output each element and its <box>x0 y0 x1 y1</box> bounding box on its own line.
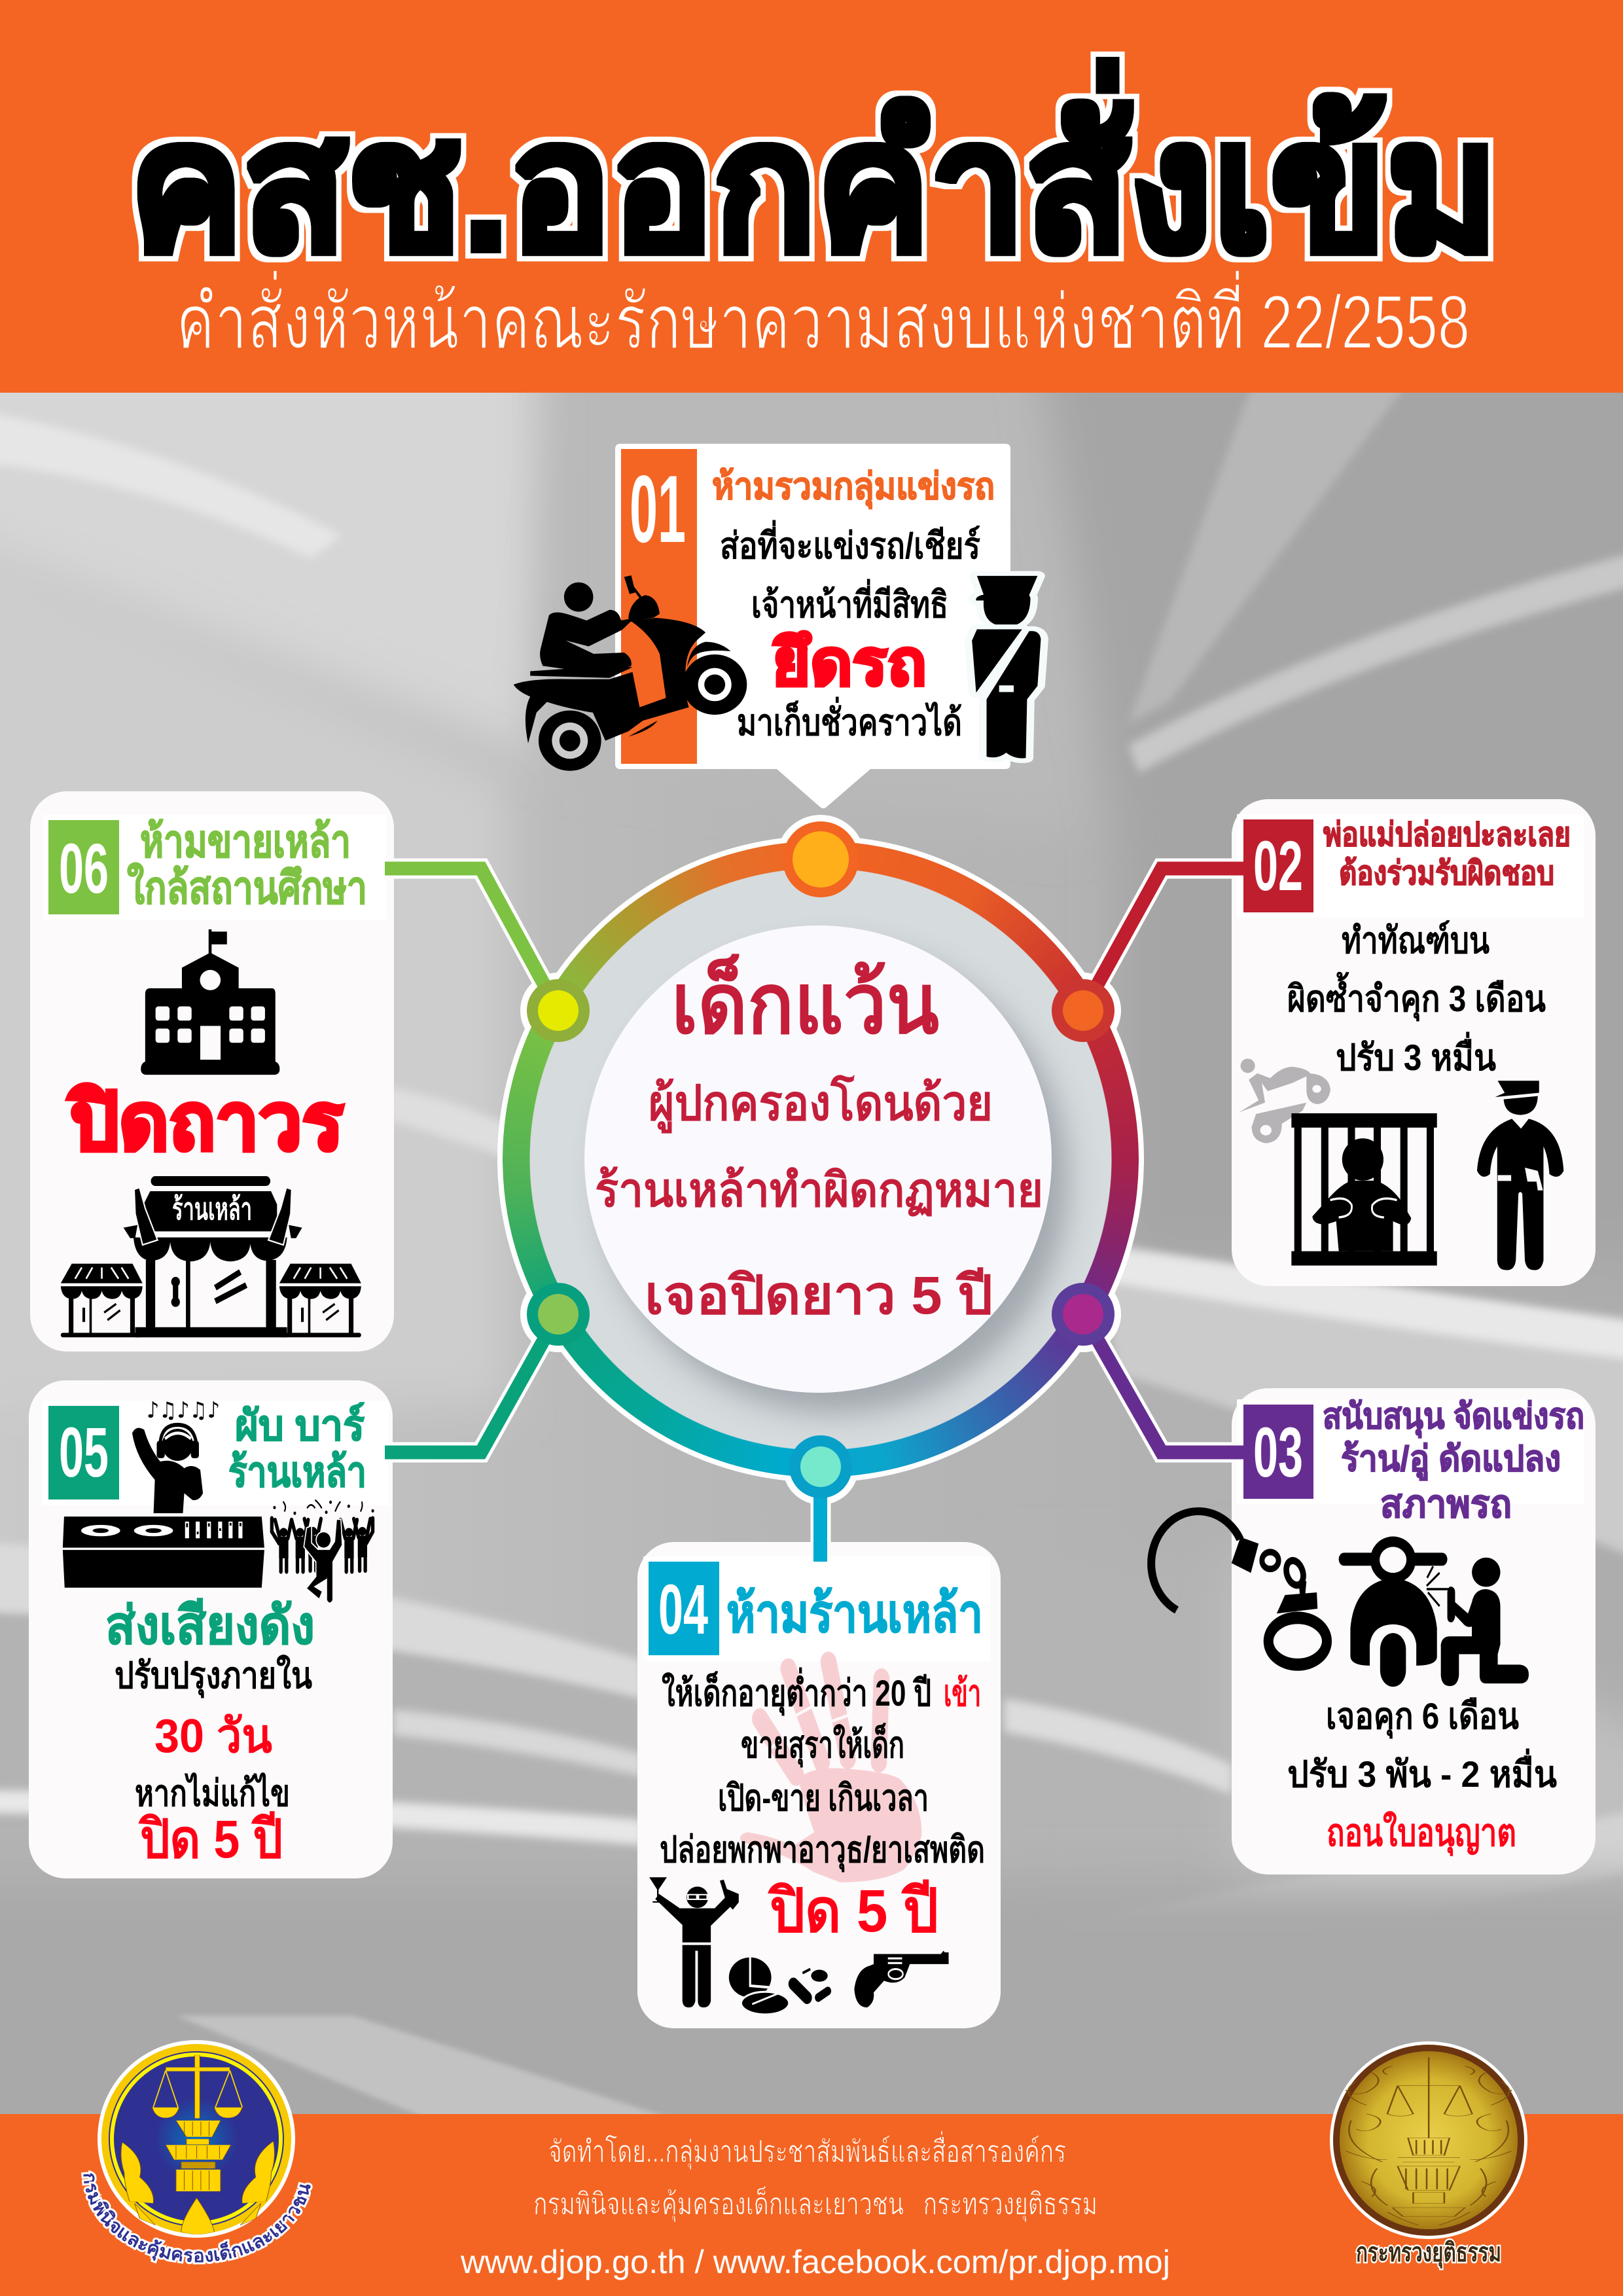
connector 04 <box>813 1466 827 1562</box>
centre line 1: ผู้ปกครองโดนด้วย <box>649 1074 993 1134</box>
node bottom <box>789 1435 852 1498</box>
icon: music notes: ♪♫♪♫♪ <box>147 1397 220 1424</box>
30 days: 30 วัน <box>154 1710 272 1763</box>
number 01: 01 <box>630 456 686 562</box>
centre line 2: ร้านเหล้าทำผิดกฏหมาย <box>595 1164 1043 1217</box>
logo: juvenile department <box>81 2040 313 2265</box>
node right lower <box>1052 1283 1115 1346</box>
centre line 3: เจอปิดยาว 5 ปี <box>645 1266 993 1325</box>
number box <box>48 1406 119 1499</box>
number 03: 03 <box>1253 1412 1303 1492</box>
body line 2: ขายสุราให้เด็ก <box>741 1722 904 1768</box>
heading: ห้ามร้านเหล้า <box>726 1585 983 1643</box>
node left upper <box>527 979 590 1042</box>
line: improve within: ปรับปรุงภายใน <box>115 1654 312 1698</box>
icon: DJ <box>132 1425 203 1513</box>
footer text <box>460 2130 1170 2280</box>
card <box>29 1380 393 1878</box>
header strip <box>643 1556 990 1661</box>
footer band <box>0 2114 1623 2296</box>
heading line 3: สภาพรถ <box>1380 1483 1512 1526</box>
icon: prisoner in cage <box>1291 1113 1437 1266</box>
icon: handcuffs <box>1151 1511 1327 1664</box>
body line 4: ปล่อยพกพาอาวุธ/ยาเสพติด <box>660 1829 985 1873</box>
card <box>30 791 394 1352</box>
card <box>637 1542 1001 2028</box>
icon: DJ deck <box>63 1516 264 1588</box>
heading line 2: ต้องร่วมรับผิดชอบ <box>1339 855 1554 891</box>
icon: officer <box>972 576 1041 758</box>
footer line 1: จัดทำโดย...กลุ่มงานประชาสัมพันธ์และสื่อสารองค์กร <box>548 2130 1066 2170</box>
card <box>1232 1388 1596 1874</box>
heading line 2: ร้านเหล้า <box>228 1448 366 1496</box>
panel 06 <box>30 791 394 1352</box>
logo banner text: กรมพินิจและคุ้มครองเด็กและเยาวชน <box>81 2170 313 2265</box>
permanently closed text: ปิดถาวร <box>67 1077 344 1166</box>
line 2: เจ้าหน้าที่มีสิทธิ <box>751 579 948 625</box>
callout box <box>615 444 1010 808</box>
panel 02 <box>1232 799 1596 1286</box>
line 3: มาเก็บชั่วคราวได้ <box>737 696 962 743</box>
red word: เข้า <box>944 1672 981 1713</box>
centre headline: เด็กแว้น <box>671 953 939 1051</box>
number 02: 02 <box>1253 826 1303 905</box>
icon: revolver <box>854 1950 949 2007</box>
icon: police officer <box>1477 1081 1563 1270</box>
number 06: 06 <box>59 829 109 908</box>
icon: liquor shops <box>61 1176 361 1337</box>
body line 1: ให้เด็กอายุต่ำกว่า 20 ปี <box>662 1667 931 1716</box>
heading line 1: ห้ามขายเหล้า <box>140 817 351 867</box>
body line 2: ปรับ 3 พัน - 2 หมื่น <box>1287 1748 1557 1795</box>
heading 01: ห้ามรวมกลุ่มแข่งรถ <box>712 465 995 509</box>
number bar <box>621 449 697 764</box>
icon: hand print <box>740 1662 921 1882</box>
grey background <box>0 327 1623 2156</box>
loud noise heading: ส่งเสียงดัง <box>105 1596 315 1655</box>
closed 5 years: ปิด 5 ปี <box>768 1878 938 1945</box>
body line 3: ปรับ 3 หมื่น <box>1336 1031 1496 1078</box>
heading line 1: สนับสนุน จัดแข่งรถ <box>1323 1397 1584 1439</box>
licence revoked: ถอนใบอนุญาต <box>1327 1810 1516 1857</box>
number box <box>1243 819 1313 912</box>
header strip <box>1237 814 1584 918</box>
node top <box>783 821 859 897</box>
icon: motorcycle rider <box>514 575 747 771</box>
central ring <box>497 836 1144 1482</box>
body line 1: เจอคุก 6 เดือน <box>1326 1695 1519 1739</box>
body line 2: ผิดซ้ำจำคุก 3 เดือน <box>1287 972 1546 1022</box>
node left lower <box>527 1283 590 1346</box>
footer line 3: www.djop.go.th / www.facebook.com/pr.djop.moj <box>460 2244 1170 2280</box>
node right upper <box>1052 979 1115 1042</box>
body line 1: ทำทัณฑ์บน <box>1342 920 1489 961</box>
seize text: ยึดรถ <box>772 627 927 698</box>
number 05: 05 <box>59 1412 109 1492</box>
title: คสช.ออกคำสั่งเข้ม <box>130 60 1499 289</box>
closed 5 years: ปิด 5 ปี <box>138 1810 283 1869</box>
panel 05 <box>29 1380 393 1878</box>
body line 3: เปิด-ขาย เกินเวลา <box>718 1777 929 1818</box>
footer line 2: กรมพินิจและคุ้มครองเด็กและเยาวชน กระทรวงยุติธรรม <box>533 2186 1097 2223</box>
number box <box>1243 1405 1313 1499</box>
number box <box>649 1562 719 1655</box>
card <box>1232 799 1596 1286</box>
ministry name: กระทรวงยุติธรรม <box>1356 2238 1501 2269</box>
centre text <box>595 953 1043 1325</box>
number box <box>48 820 119 914</box>
grey inner disc <box>503 841 1139 1477</box>
connector 02 <box>1083 869 1243 1011</box>
heading line 1: พ่อแม่ปล่อยปะละเลย <box>1323 816 1571 853</box>
panel 03 <box>1151 1388 1596 1874</box>
header strip <box>43 815 386 920</box>
heading line 1: ผับ บาร์ <box>235 1402 365 1449</box>
logo: ministry of justice <box>1330 2041 1527 2269</box>
header strip <box>42 1401 389 1505</box>
gradient ring stroke <box>503 841 1139 1477</box>
icon: scooter mechanic <box>1339 1537 1529 1687</box>
panel 01 <box>514 444 1041 808</box>
icon: pills <box>729 1956 832 2015</box>
connector 05 <box>385 1314 558 1452</box>
number 04: 04 <box>658 1570 708 1649</box>
shop sign: ร้านเหล้า <box>172 1192 252 1226</box>
connector 06 <box>385 869 558 1011</box>
heading line 2: ใกล้สถานศึกษา <box>127 862 367 913</box>
header band <box>0 0 1623 393</box>
connector halos <box>376 869 1250 1551</box>
white centre disc <box>584 925 1052 1393</box>
icon: man with drink <box>649 1877 739 2007</box>
panel 04 <box>637 1542 1001 2028</box>
icon: dancing crowd <box>272 1500 374 1602</box>
line 1: ส่อที่จะแข่งรถ/เชียร์ <box>720 520 980 566</box>
connector 03 <box>1083 1314 1243 1452</box>
icon: stunt bike <box>1240 1058 1330 1143</box>
line: if not fixed: หากไม่แก้ไข <box>135 1772 290 1814</box>
header strip <box>1237 1399 1584 1504</box>
heading line 2: ร้าน/อู่ ดัดแปลง <box>1341 1439 1561 1480</box>
icon: school <box>141 929 279 1075</box>
node halos <box>520 815 1121 1505</box>
